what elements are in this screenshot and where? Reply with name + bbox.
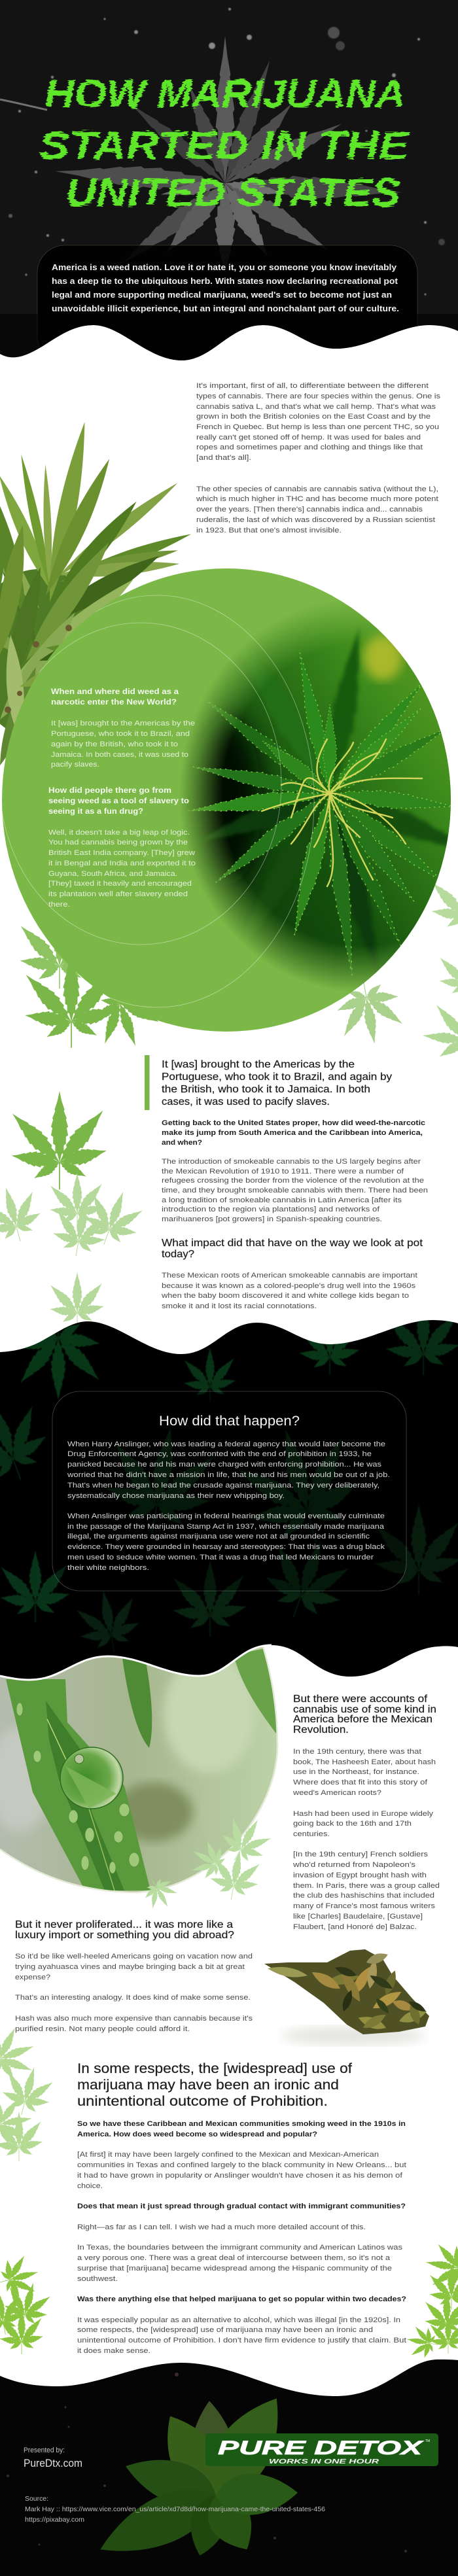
- answer: Mexican Revolution: the Mexican Revolution of 1910 to 1911. There were a number of: [162, 1168, 404, 1175]
- oval text: weed enters New World: pacify slaves.: [51, 761, 99, 769]
- heading: accounts before revolution: But there were accounts of: [293, 1694, 428, 1705]
- answer: Mexican roots: when the baby boom discovered it and white college kids began to: [161, 1292, 409, 1300]
- oval text: weed enters New World: When and where did weed as a: [51, 687, 179, 696]
- answer: Mexican Revolution: refugees crossing the border from the violence of the revolution at the: [162, 1177, 424, 1185]
- question: widespread: So we have these Caribbean and Mexican communities smoking weed in the 1910s in: [77, 2120, 406, 2128]
- text: ayahuasca analogy: Hash was also much more expensive than cannabis because it's: [15, 2015, 253, 2023]
- oval text: slavery to fun drug: Well, it doesn't take a big leap of logic.: [48, 829, 190, 837]
- heading: accounts before revolution: Revolution.: [293, 1724, 349, 1735]
- text: French soldiers: them. In Paris, there was a group called: [293, 1882, 440, 1890]
- thin oval lines: [0, 595, 314, 1007]
- text: ayahuasca analogy: purified resin. Not many people could afford it.: [15, 2025, 190, 2033]
- answer: alcohol alternative: [77, 2316, 407, 2355]
- presented by: Presented by:: [24, 2446, 65, 2454]
- question: widespread: [77, 2120, 406, 2138]
- intro text: [52, 262, 399, 313]
- paragraph: hearings: evidence. They were grounded in hearsay and stereotypes: That this was a drug black: [67, 1543, 385, 1551]
- text: species of cannabis: grown in both the British colonies on the East Coast and by the: [196, 413, 431, 421]
- leaf: large bright: [7, 1091, 110, 1189]
- leaf: bright behind oval: [84, 975, 167, 1057]
- answer: alcohol alternative: some respects, the [widespread] use of marijuana may have been an ironic and: [77, 2326, 373, 2334]
- leaf: under left of oval: [16, 907, 101, 988]
- oval text: slavery to fun drug: it in Bengal and India and exported it to: [48, 860, 196, 867]
- pull quote: cases, it was used to pacify slaves.: [162, 1096, 330, 1107]
- text: hash in Europe: going back to the 16th and 17th: [293, 1820, 412, 1828]
- text: French soldiers: Flaubert, [and Honoré de] Balzac.: [293, 1923, 417, 1931]
- text: hash in Europe: centuries.: [293, 1830, 330, 1838]
- oval text: slavery to fun drug: there.: [48, 901, 70, 909]
- answer: right: Right—as far as I can tell. I wish we had a much more detailed account of this.: [77, 2223, 366, 2231]
- answer: Mexican Revolution: a long tradition of smokeable cannabis in Latin America [after its: [162, 1196, 402, 1204]
- leaf: pale right: [428, 867, 458, 934]
- paragraph: hearings: [67, 1512, 385, 1572]
- footer section: [0, 2355, 458, 2576]
- leaf: pale right far: [410, 984, 458, 1075]
- text: species of cannabis: which is much higher in THC and has become much more potent: [196, 495, 439, 503]
- cannabis bud photo: [264, 1949, 429, 2045]
- heading: impact: [162, 1238, 423, 1260]
- source credits: Source:: [25, 2495, 48, 2503]
- pull heading: Prohibition: marijuana may have been an ironic and: [77, 2077, 339, 2093]
- question: gradual contact: Does that mean it just spread through gradual contact with immigrant communities?: [77, 2202, 406, 2210]
- answer: Texas: In Texas, the boundaries between the immigrant community and American Latinos was: [77, 2244, 402, 2252]
- answer: at first: [77, 2151, 407, 2190]
- answer: alcohol alternative: It was especially popular as an alternative to alcohol, which was illegal [in the 1920s]. In: [77, 2316, 400, 2324]
- text: species of cannabis: types of cannabis. There are four species within the genus. One is: [196, 392, 440, 400]
- header dark background: [0, 0, 458, 366]
- text: species of cannabis: [196, 382, 440, 534]
- brand name: PURE DETOX: [218, 2437, 424, 2459]
- large water droplet: [60, 1747, 123, 1809]
- text: Hasheesh Eater: book, The Hasheesh Eater, about hash: [293, 1758, 436, 1766]
- photo yellow highlight: [363, 635, 402, 680]
- text: species of cannabis: [and that's all].: [196, 454, 251, 462]
- answer: Mexican roots: because it was known as a colored-people's drug well into the 1960s: [162, 1282, 415, 1290]
- answer: alcohol alternative: unintentional outcome of Prohibition. I don't have firm evidence to justify that claim. But: [77, 2337, 407, 2344]
- droplet leaf photo: [0, 1642, 281, 1897]
- oval text: slavery to fun drug: [48, 786, 196, 909]
- soft background leaves: [205, 629, 448, 967]
- brand badge: [205, 2433, 438, 2466]
- question: anything else: Was there anything else that helped marijuana to get so popular within two decades?: [77, 2295, 406, 2303]
- photo dark hollow: [190, 716, 262, 886]
- section heading: How did that happen?: [159, 1413, 300, 1429]
- oval text: slavery to fun drug: British East India company. [They] grew: [48, 849, 196, 857]
- pull heading: Prohibition: In some respects, the [widespread] use of: [77, 2061, 352, 2076]
- text: French soldiers: [292, 1851, 440, 1931]
- text: French soldiers: who'd returned from Napoleon's: [292, 1861, 415, 1869]
- source credits: Mark Hay :: https://www.vice.com/en_us/article/xd7d8d/how-marijuana-came-the-united-states-456: [25, 2505, 325, 2513]
- paragraph: hearings: their white neighbors.: [67, 1564, 149, 1572]
- paragraph: Anslinger: worried that he didn't have a mission in life, that he and his men would be out of a job.: [67, 1471, 390, 1479]
- oval text: slavery to fun drug: You had cannabis being grown by the: [48, 839, 188, 846]
- text: ayahuasca analogy: So it'd be like well-heeled Americans going on vacation now and: [15, 1953, 253, 1960]
- answer: Mexican Revolution: marihuaneros [pot growers] in Spanish-speaking countries.: [162, 1215, 382, 1223]
- bright leaves bottom left: [0, 2251, 56, 2354]
- intro panel: [0, 245, 458, 373]
- paragraph: Anslinger: That's when he began to lead the crusade against marijuana. They very deliberately,: [67, 1482, 379, 1489]
- text: species of cannabis: over the years. [Then there's] cannabis indica and... cannabis: [196, 506, 423, 513]
- pull quote: [162, 1059, 392, 1107]
- paragraph: Anslinger: systematically chose marijuana as their new whipping boy.: [67, 1492, 285, 1500]
- pull quote: Portuguese, who took it to Brazil, and again by: [162, 1071, 392, 1083]
- dark section: How did that happen: [0, 1298, 458, 1688]
- text: French soldiers: the club des hashischins that included: [293, 1892, 434, 1900]
- paragraph: Anslinger: [67, 1440, 390, 1500]
- green oval panel: [0, 568, 458, 1032]
- pull heading: Prohibition: unintentional outcome of Prohibition.: [77, 2093, 328, 2109]
- oval text: weed enters New World: Jamaica. In both cases, it was used to: [51, 751, 188, 759]
- text: species of cannabis: ruderalis, the last of which was discovered by a Russian scientist: [196, 516, 436, 524]
- text: Hasheesh Eater: [292, 1748, 436, 1797]
- text: Hasheesh Eater: In the 19th century, there was that: [293, 1748, 422, 1756]
- paragraph: Anslinger: Drug Enforcement Agency, was confronted with the end of prohibition in 1933, he: [67, 1450, 372, 1458]
- pull quote: It [was] brought to the Americas by the: [162, 1059, 355, 1070]
- source credits: https://pixabay.com: [25, 2516, 84, 2524]
- presented by: [24, 2446, 82, 2469]
- text: French soldiers: [In the 19th century] French soldiers: [293, 1851, 428, 1858]
- back leaves: [122, 1658, 152, 1748]
- background texture specks: [9, 8, 445, 296]
- question: jump into America: Getting back to the United States proper, how did weed-the-narcotic: [162, 1119, 425, 1127]
- question: jump into America: make its jump from South America and the Caribbean into America,: [162, 1129, 423, 1137]
- leaf column: bright leaves: [7, 953, 120, 1189]
- answer: at first: [At first] it may have been largely confined to the Mexican and Mexican-American: [77, 2151, 379, 2159]
- text: French soldiers: like [Charles] Baudelaire, [Gustave]: [293, 1913, 423, 1921]
- answer: at first: choice.: [77, 2182, 103, 2190]
- oval text: weed enters New World: [51, 687, 195, 769]
- title: HOW MARIJUANA: [44, 72, 406, 116]
- presented by: PureDtx.com: [24, 2457, 82, 2469]
- oval text: weed enters New World: again by the British, who took it to: [51, 740, 178, 748]
- question: jump into America: [162, 1119, 425, 1147]
- paragraph: hearings: men used to seduce white women. That it was a drug that led Mexicans to murder: [67, 1554, 374, 1561]
- droplet photo outline: [0, 1642, 277, 1892]
- cannabis flower photo: [0, 576, 458, 1027]
- small droplets: [16, 1703, 139, 1873]
- text: ayahuasca analogy: expense?: [15, 1974, 50, 1981]
- title: STARTED IN THE: [39, 124, 410, 167]
- text: French soldiers: many of France's most famous writers: [293, 1902, 435, 1910]
- text: species of cannabis: ropes and sometimes paper and clothing and things like that: [196, 444, 423, 451]
- text: Hasheesh Eater: weed's American roots?: [292, 1789, 381, 1797]
- question: jump into America: and when?: [162, 1139, 202, 1147]
- hemp foliage mass: [0, 569, 108, 739]
- intro text: unavoidable illicit experience, but an integral and nonchalant part of our culture.: [52, 304, 399, 313]
- oval text: slavery to fun drug: seeing it as a fun drug?: [48, 807, 143, 816]
- text: ayahuasca analogy: [15, 1953, 253, 2033]
- answer: Mexican Revolution: time, and they brought smokeable cannabis with them. There had been: [162, 1187, 428, 1194]
- answer: Texas: [77, 2244, 402, 2283]
- answer: Texas: southwest.: [77, 2275, 118, 2283]
- intro text: legal and more supporting medical marijuana, weed's set to become not just an: [52, 290, 392, 300]
- source credits: [25, 2495, 325, 2524]
- title: UNITED STATES: [65, 171, 400, 215]
- answer: Mexican Revolution: The introduction of smokeable cannabis to the US largely begins after: [162, 1158, 421, 1166]
- heading: never proliferated: But it never proliferated... it was more like a: [15, 1919, 233, 1930]
- intro text: America is a weed nation. Love it or hate it, you or someone you know inevitably: [52, 262, 397, 272]
- heading: accounts before revolution: [293, 1694, 436, 1735]
- flower pistils: [262, 739, 422, 886]
- heading: impact: What impact did that have on the way we look at pot: [162, 1238, 423, 1249]
- text: ayahuasca analogy: That's an interesting analogy. It does kind of make some sense.: [15, 1994, 251, 2002]
- main leaf: [6, 1679, 150, 1890]
- text: species of cannabis: It's important, first of all, to differentiate between the different: [196, 382, 429, 390]
- heading: accounts before revolution: cannabis use of some kind in: [293, 1704, 436, 1715]
- lower black area: [0, 314, 458, 360]
- answer: Mexican Revolution: introduction to the region via plantations] and networks of: [162, 1206, 380, 1213]
- hemp plant buds: [5, 625, 72, 713]
- footer leaves: [90, 2384, 299, 2571]
- text: hash in Europe: Hash had been used in Europe widely: [293, 1810, 433, 1818]
- answer: Mexican roots: These Mexican roots of American smokeable cannabis are important: [162, 1272, 418, 1279]
- footer specks: [7, 2373, 407, 2552]
- heading: accounts before revolution: America before the Mexican: [293, 1714, 432, 1725]
- hemp plant photo: [0, 421, 193, 768]
- answer: Mexican roots: smoke it and it lost its racial connotations.: [162, 1302, 317, 1310]
- text: species of cannabis: cannabis sativa L, and that's what we call hemp. That's what was: [196, 403, 436, 411]
- white wave edge: [0, 1645, 272, 1680]
- text: Hasheesh Eater: use in the Northeast, for instance.: [293, 1768, 419, 1776]
- leaf column: pale leaves: [0, 1173, 150, 1329]
- text: species of cannabis: The other species of cannabis are cannabis sativa (without the L),: [196, 485, 438, 493]
- leaf: pale right lower: [436, 945, 458, 1000]
- text: species of cannabis: French in Quebec. But hemp is less than one percent THC, so you: [196, 423, 439, 431]
- oval text: weed enters New World: It [was] brought to the Americas by the: [51, 720, 195, 727]
- oval text: slavery to fun drug: seeing weed as a tool of slavery to: [48, 796, 189, 805]
- text: species of cannabis: in 1923. But that one's almost invisible.: [196, 527, 342, 534]
- flower leaves: [187, 651, 455, 977]
- heading: never proliferated: luxury import or something you did abroad?: [15, 1930, 234, 1941]
- leaf: medium bright: [20, 953, 120, 1048]
- answer: Texas: surprise that [marijuana] became widespread among the Hispanic community of the: [77, 2265, 392, 2272]
- intro text: has a deep tie to the ubiquitous herb. With states now declaring recreational pot: [52, 276, 398, 286]
- answer: Texas: a very porous one. There was a great deal of intercourse between them, so it's not a: [77, 2254, 391, 2262]
- paragraph: hearings: When Anslinger was participating in federal hearings that would eventually culminate: [67, 1512, 385, 1520]
- header section: [0, 0, 458, 373]
- text panel: [52, 1391, 406, 1591]
- quote bar: [145, 1055, 149, 1110]
- text: species of cannabis: really can't get stoned off of hemp. It was used for bales and: [196, 434, 421, 442]
- dark section background: [0, 1308, 458, 1688]
- oval text: slavery to fun drug: How did people there go from: [48, 786, 171, 795]
- oval text: slavery to fun drug: [They] taxed it heavily and encouraged: [48, 880, 192, 888]
- pull quote: the British, who took it to Jamaica. In both: [162, 1084, 370, 1095]
- gray cannabis plant: [54, 36, 402, 275]
- dark green leaves: [0, 1298, 458, 1658]
- answer: Mexican roots: [161, 1272, 418, 1310]
- paragraph: hearings: in the passage of the Marijuana Stamp Act in 1937, which essentially made marijuana: [67, 1523, 385, 1531]
- text: ayahuasca analogy: trying ayahuasca vines and maybe bringing back a bit at great: [15, 1963, 245, 1971]
- trademark: TM: [425, 2439, 430, 2443]
- text: hash in Europe: [293, 1810, 433, 1838]
- oval text: weed enters New World: narcotic enter the New World?: [51, 697, 177, 706]
- oval text: slavery to fun drug: its plantation well after slavery ended: [48, 890, 188, 898]
- oval text: slavery to fun drug: Guyana, South Africa, and Jamaica.: [48, 870, 177, 878]
- paragraph: Anslinger: When Harry Anslinger, who was leading a federal agency that would later become the: [67, 1440, 385, 1448]
- answer: alcohol alternative: it does make sense.: [77, 2347, 150, 2355]
- answer: at first: it had to have grown in popularity or Anslinger wouldn't have chosen it as his demon of: [77, 2172, 403, 2180]
- background twig: [0, 99, 47, 110]
- text: Hasheesh Eater: Where does that fit into this story of: [293, 1779, 428, 1786]
- bud details: [267, 1951, 429, 2032]
- footer background: [0, 2355, 458, 2576]
- title: [39, 72, 410, 215]
- question: widespread: America. How does weed become so widespread and popular?: [77, 2131, 317, 2138]
- heading: impact: today?: [162, 1249, 194, 1260]
- answer: Mexican Revolution: [162, 1158, 428, 1223]
- answer: at first: communities in Texas and confined largely to the black community in New Orleans... but: [77, 2161, 407, 2169]
- blurred photo background: [114, 1783, 193, 1841]
- oval text: weed enters New World: Portuguese, who took it to Brazil, and: [51, 730, 190, 738]
- paragraph: hearings: illegal, the arguments against marijuana use were not at all grounded in scientific: [67, 1533, 370, 1540]
- heading: never proliferated: [15, 1919, 234, 1941]
- leaves left of Prohibition section: [0, 2021, 59, 2161]
- text: French soldiers: invasion of Egypt brought hash with: [293, 1871, 427, 1879]
- paragraph: Anslinger: panicked because he and his man were charged with enforcing prohibition... He was: [67, 1461, 381, 1469]
- leaf group under droplet photo: [138, 1807, 279, 1915]
- leaf: pale behind oval: [330, 974, 409, 1050]
- pull heading: Prohibition: [77, 2061, 352, 2109]
- bright leaves bottom right: [404, 2240, 458, 2361]
- tagline: WORKS IN ONE HOUR: [269, 2458, 379, 2465]
